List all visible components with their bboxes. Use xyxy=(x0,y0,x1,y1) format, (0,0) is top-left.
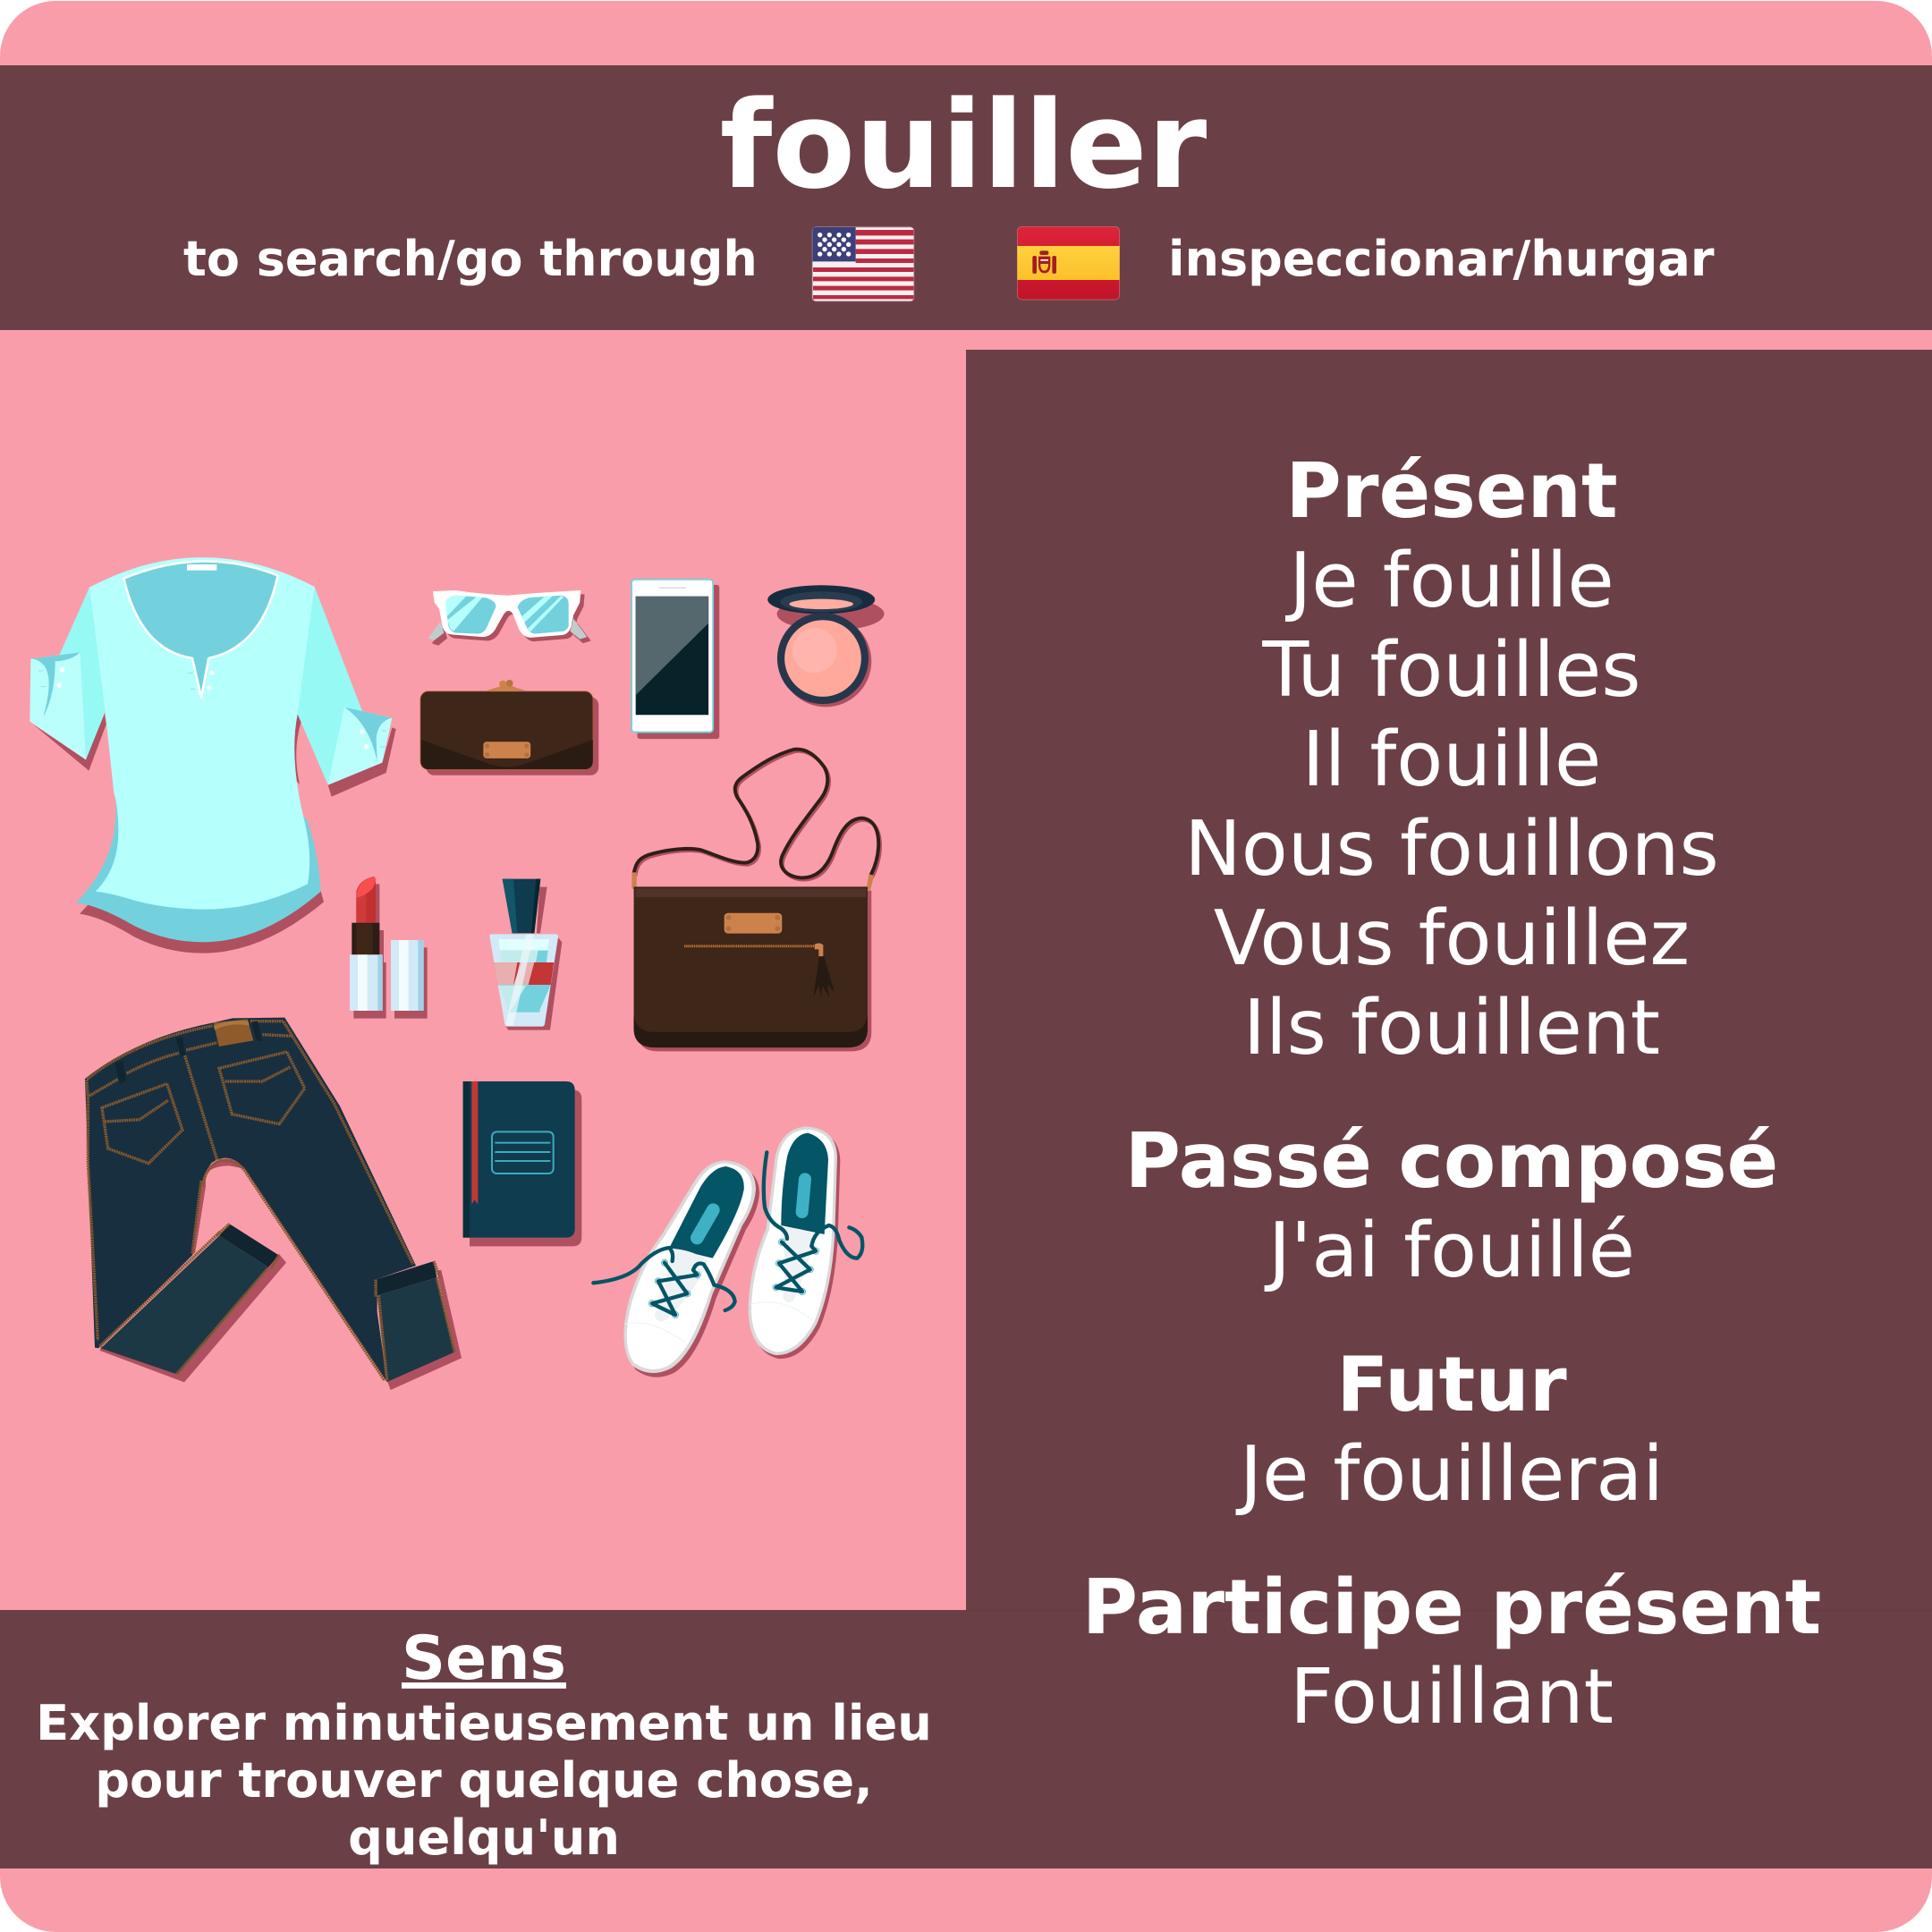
Futur conjugation: Je fouillerai xyxy=(1235,1430,1664,1519)
icon: Spain flag xyxy=(1017,226,1120,300)
icon: blouse xyxy=(30,557,396,953)
Participe présent conjugation xyxy=(1082,1563,1821,1741)
right sneaker xyxy=(749,1126,862,1359)
definition text: pour trouver quelque chose, xyxy=(95,1752,873,1809)
Présent conjugation: Nous fouillons xyxy=(1184,805,1719,894)
icon: wallet xyxy=(420,680,598,775)
lipstick cap xyxy=(391,940,428,1019)
header band xyxy=(0,65,1932,330)
Présent conjugation: Ils fouillent xyxy=(1243,984,1660,1072)
panel: meaning xyxy=(0,1610,966,1868)
icon: perfume bottle xyxy=(489,879,562,1030)
Passé composé conjugation xyxy=(1125,1117,1778,1295)
Participe présent conjugation: Fouillant xyxy=(1290,1653,1614,1741)
Présent conjugation: Tu fouilles xyxy=(1261,626,1641,715)
Passé composé conjugation: J'ai fouillé xyxy=(1264,1207,1635,1295)
Présent conjugation: Présent xyxy=(1285,447,1618,536)
icon: smartphone xyxy=(631,580,719,739)
icon: blush compact xyxy=(767,585,885,707)
definition text: quelqu'un xyxy=(348,1809,620,1866)
left sneaker xyxy=(593,1160,759,1377)
Futur conjugation xyxy=(1235,1341,1664,1519)
panel: conjugations xyxy=(966,350,1932,1868)
Passé composé conjugation: Passé composé xyxy=(1125,1117,1778,1206)
title: fouiller xyxy=(720,75,1208,216)
icon: sneakers xyxy=(593,1126,862,1377)
icon: jeans xyxy=(85,1018,462,1390)
heading: Sens: Sens xyxy=(402,1623,566,1694)
Participe présent conjugation: Participe présent xyxy=(1082,1563,1821,1652)
Présent conjugation xyxy=(1184,447,1719,1072)
Spanish translation: inspeccionar/hurgar xyxy=(1168,231,1715,287)
Présent conjugation: Je fouille xyxy=(1284,537,1614,625)
definition text: Explorer minutieusement un lieu xyxy=(36,1695,932,1751)
Futur conjugation: Futur xyxy=(1336,1341,1567,1429)
icon: lipstick xyxy=(350,877,428,1019)
Présent conjugation: Il fouille xyxy=(1302,716,1601,804)
icon: sunglasses xyxy=(428,590,591,646)
definition text xyxy=(36,1695,932,1866)
English translation: to search/go through xyxy=(183,231,758,287)
Présent conjugation: Vous fouillez xyxy=(1214,894,1690,983)
icon: notebook xyxy=(463,1081,581,1246)
icon: shoulder bag xyxy=(631,750,880,1051)
icon: US flag xyxy=(812,227,914,301)
